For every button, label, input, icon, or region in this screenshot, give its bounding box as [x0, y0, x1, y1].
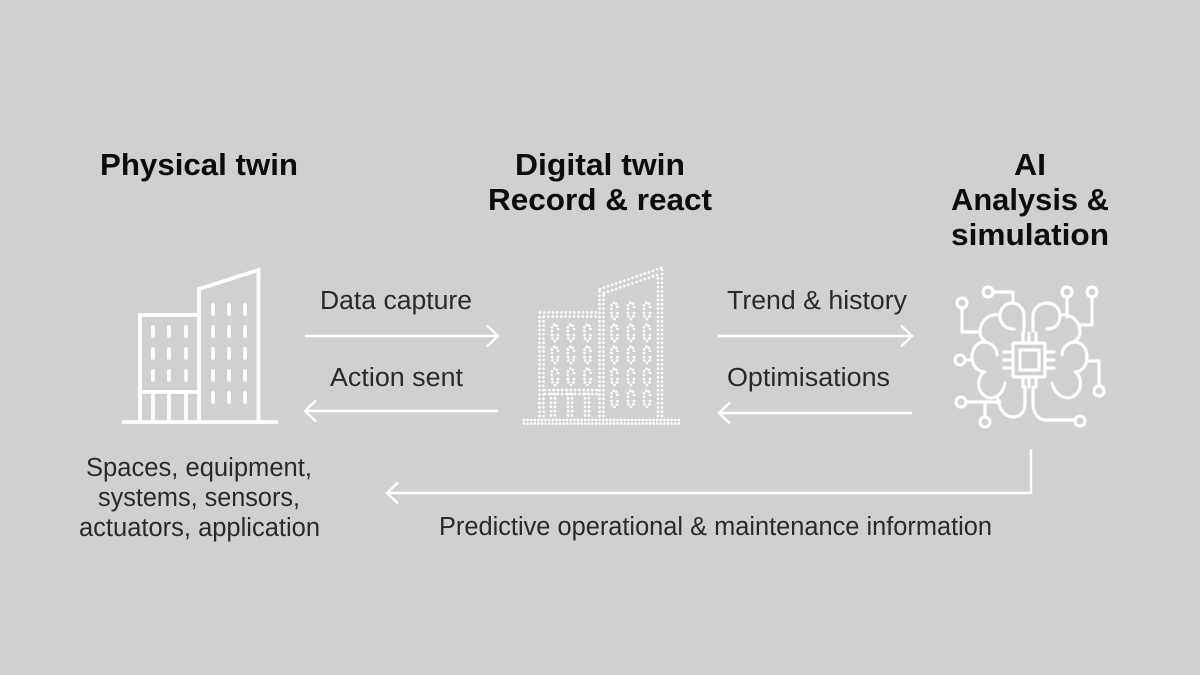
heading: digital twin, record and react: Record & react — [488, 183, 712, 217]
circuit lines — [962, 292, 1099, 420]
brain left hemisphere — [972, 303, 1025, 417]
icon: AI brain with chip — [955, 287, 1104, 427]
heading: AI analysis and simulation: Analysis & — [951, 183, 1109, 217]
heading: digital twin, record and react — [488, 148, 712, 217]
heading: AI analysis and simulation — [951, 148, 1109, 252]
icon: physical building — [124, 270, 276, 422]
text: physical twin components — [79, 454, 320, 542]
label: data capture: Data capture — [320, 287, 472, 315]
label: action sent: Action sent — [330, 364, 463, 392]
arrow: optimisations — [719, 402, 912, 424]
arrow: predictive feedback — [387, 449, 1031, 504]
arrow: data capture — [305, 326, 498, 346]
label: predictive information: Predictive operational & maintenance information — [439, 513, 992, 541]
arrow: trend and history — [718, 326, 912, 346]
heading: digital twin, record and react: Digital twin — [515, 148, 685, 182]
arrow: action sent — [305, 400, 498, 422]
heading: AI analysis and simulation: simulation — [951, 218, 1109, 252]
label: trend and history: Trend & history — [727, 287, 907, 315]
chip — [1004, 333, 1054, 387]
text: physical twin components: systems, sensors, — [98, 484, 300, 512]
circuit nodes — [955, 287, 1104, 427]
text: physical twin components: actuators, application — [79, 514, 320, 542]
label: optimisations: Optimisations — [727, 364, 890, 392]
heading: physical twin: Physical twin — [100, 148, 298, 182]
brain right hemisphere — [1033, 303, 1087, 420]
text: physical twin components: Spaces, equipment, — [86, 454, 312, 482]
heading: AI analysis and simulation: AI — [1014, 148, 1046, 182]
icon: digital dotted building — [524, 268, 680, 424]
